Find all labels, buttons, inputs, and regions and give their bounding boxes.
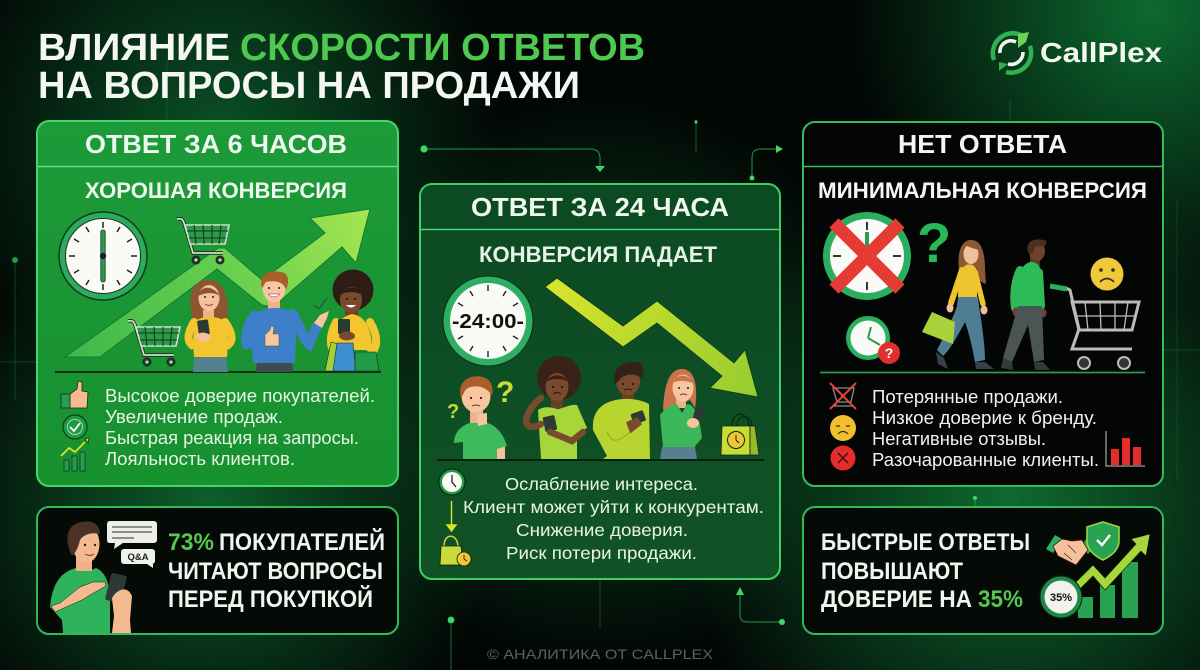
list: losses: Низкое доверие к бренду. xyxy=(872,408,1097,428)
arrow: growth xyxy=(1075,534,1150,590)
icon: falling bars xyxy=(1106,431,1145,466)
list: losses: Разочарованные клиенты. xyxy=(872,450,1099,470)
icon: 35 percent badge: 35% xyxy=(1050,592,1072,604)
person: woman with shopping bags xyxy=(325,270,379,371)
icon: clock with red question: ? xyxy=(885,345,893,361)
person: man with thumbs up xyxy=(246,271,329,372)
heading: 24 hours: ОТВЕТ ЗА 24 ЧАСА xyxy=(471,192,729,222)
icon: Q and A bubble: Q&A xyxy=(127,552,149,563)
icon: cart lower xyxy=(128,321,180,366)
person: walking woman xyxy=(922,240,994,369)
list: risks: Ослабление интереса. xyxy=(505,474,698,494)
list: benefits xyxy=(105,386,375,469)
ground line xyxy=(437,459,764,461)
person: walking man xyxy=(1001,239,1050,370)
list: benefits: Быстрая реакция на запросы. xyxy=(105,428,359,448)
stat text: ДОВЕРИЕ НА xyxy=(821,586,972,613)
icon: question marks xyxy=(447,376,514,423)
title xyxy=(38,27,645,107)
icon: check badge xyxy=(63,415,87,439)
icon: sad face xyxy=(1090,258,1124,290)
stat text: 35% xyxy=(978,586,1023,613)
title: ВЛИЯНИЕ xyxy=(38,27,230,69)
list: benefits: Высокое доверие покупателей. xyxy=(105,386,375,406)
list: risks: Клиент может уйти к конкурентам. xyxy=(463,497,764,517)
arrow: rising conversion xyxy=(65,209,370,357)
list: losses: Негативные отзывы. xyxy=(872,429,1046,449)
person: man reading phone xyxy=(50,522,132,633)
logo: CallPlex: CallPlex xyxy=(1040,37,1162,68)
list: benefits: Увеличение продаж. xyxy=(105,407,283,427)
ground line xyxy=(820,372,1145,374)
stat text xyxy=(168,528,385,613)
icon: shopping bag with clock xyxy=(721,414,759,455)
icon: clock 24:00 xyxy=(443,276,533,366)
ground line xyxy=(55,371,381,373)
person: confused man xyxy=(454,376,507,459)
icon: crossed cart xyxy=(830,383,856,409)
stat text: ПЕРЕД ПОКУПКОЙ xyxy=(168,585,373,613)
list: losses: Потерянные продажи. xyxy=(872,387,1063,407)
stat text xyxy=(821,529,1030,613)
stat text: БЫСТРЫЕ ОТВЕТЫ xyxy=(821,529,1030,556)
arrow: falling conversion xyxy=(545,278,758,397)
heading: 6 hours: ОТВЕТ ЗА 6 ЧАСОВ xyxy=(85,129,347,159)
title: НА ВОПРОСЫ НА ПРОДАЖИ xyxy=(38,65,580,107)
person: man with phone xyxy=(593,362,650,459)
heading: no answer: НЕТ ОТВЕТА xyxy=(898,129,1067,159)
person: woman with phone xyxy=(188,280,232,372)
icon: Q and A bubble xyxy=(121,549,155,568)
icon: clock 6:00 xyxy=(59,212,147,300)
icon: small clock xyxy=(439,469,465,495)
subheading: good conversion: ХОРОШАЯ КОНВЕРСИЯ xyxy=(85,178,347,203)
person: woman with phone xyxy=(660,369,705,459)
stat text: ЧИТАЮТ ВОПРОСЫ xyxy=(168,558,383,585)
icon: question marks: ? xyxy=(447,401,459,423)
icon: red cross xyxy=(830,446,856,470)
list: benefits: Лояльность клиентов. xyxy=(105,449,295,469)
icon: sad emoji xyxy=(830,415,856,441)
panel: 73 percent stat xyxy=(37,507,398,634)
icon: question mark: ? xyxy=(917,211,951,274)
icon: handshake xyxy=(1046,535,1094,565)
list: risks xyxy=(463,474,764,563)
footer copyright: © АНАЛИТИКА ОТ CALLPLEX xyxy=(487,646,714,662)
icon: shield xyxy=(1087,522,1119,560)
panel: no answer xyxy=(803,122,1163,486)
list: losses xyxy=(872,387,1099,470)
stat text: ПОКУПАТЕЛЕЙ xyxy=(219,528,385,556)
logo: CallPlex xyxy=(993,32,1162,73)
list: risks: Снижение доверия. xyxy=(516,520,688,540)
icon: speech bubble xyxy=(107,521,157,549)
icon: cart upper xyxy=(177,219,229,264)
icon: question marks: ? xyxy=(496,376,514,409)
chart: growth bars xyxy=(1078,562,1138,618)
subheading: conversion falls: КОНВЕРСИЯ ПАДАЕТ xyxy=(479,242,717,267)
subheading: minimal conversion: МИНИМАЛЬНАЯ КОНВЕРСИЯ xyxy=(818,178,1147,203)
stat text: ПОВЫШАЮТ xyxy=(821,558,963,585)
icon: clock 24:00: -24:00- xyxy=(452,310,524,333)
icon: shopping cart xyxy=(1050,286,1139,369)
panel: 24 hours xyxy=(420,184,780,579)
person: worried woman xyxy=(526,356,587,459)
panel: 6 hours xyxy=(37,121,398,486)
title: СКОРОСТИ ОТВЕТОВ xyxy=(240,27,645,69)
icon: clock with red question xyxy=(846,316,900,364)
icon: crossed-out clock xyxy=(823,212,911,300)
stat text: 73% xyxy=(168,529,214,556)
icon: growth chart xyxy=(61,438,89,471)
panel: 35 percent stat xyxy=(803,507,1163,634)
arrow: small down xyxy=(447,501,456,531)
icon: small bag with clock xyxy=(440,536,471,566)
icon: 35 percent badge xyxy=(1040,576,1082,618)
list: risks: Риск потери продажи. xyxy=(506,543,697,563)
icon: thumbs up xyxy=(61,381,88,408)
